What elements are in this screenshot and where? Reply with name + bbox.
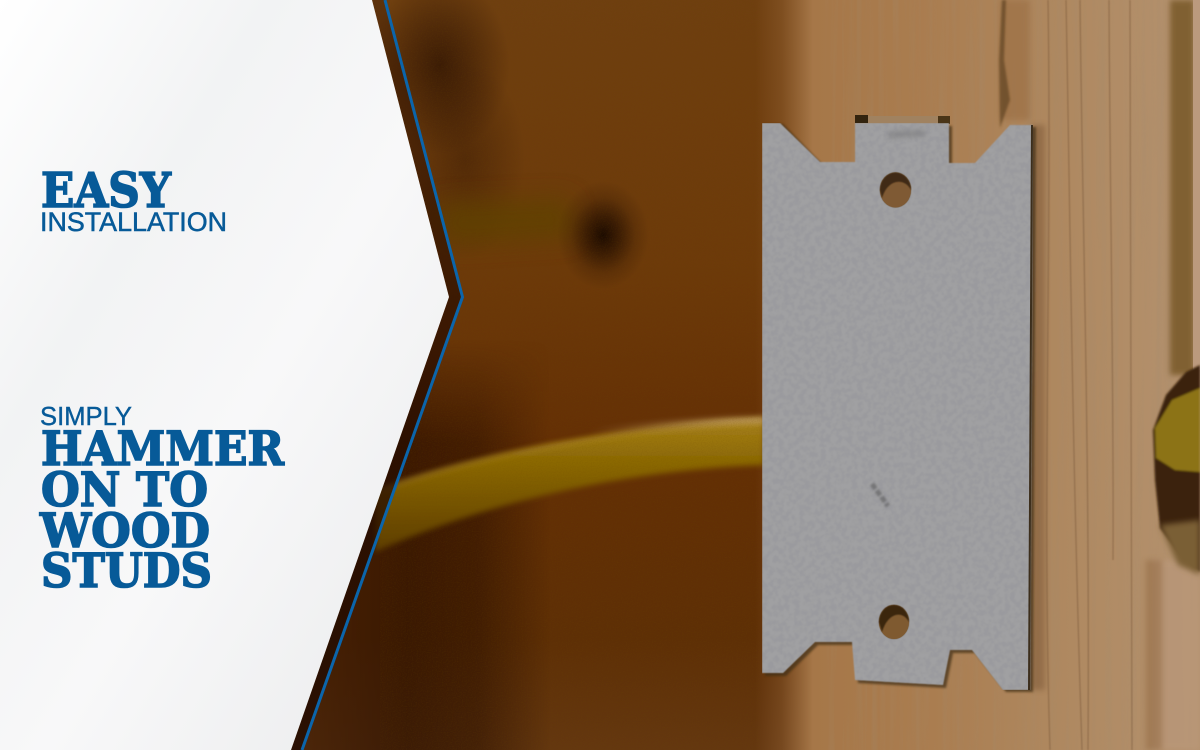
words: on to: ON TO — [41, 463, 208, 518]
plate marks — [872, 484, 888, 506]
heading: easy installation — [40, 163, 227, 237]
blue chevron line — [302, 0, 462, 750]
background photo: blurred brown cavity — [291, 0, 812, 750]
white text panel — [0, 0, 449, 750]
blurred wire in background — [435, 198, 575, 245]
hole: top — [880, 172, 911, 208]
word: studs: STUDS — [41, 544, 212, 599]
word: hammer: HAMMER — [41, 422, 285, 477]
wood stud — [755, 0, 1200, 750]
metal nail plate — [762, 115, 1036, 692]
word: simply: SIMPLY — [40, 401, 132, 431]
heading word: installation: INSTALLATION — [40, 207, 227, 237]
film grain over photo — [380, 0, 760, 750]
heading word: easy: EASY — [41, 163, 172, 219]
dark crack in wood — [999, 0, 1010, 128]
drilled hole with wire — [1153, 365, 1200, 575]
rear stud strip — [1170, 0, 1194, 375]
hole: bottom — [879, 605, 909, 639]
dark band beside white panel — [291, 0, 463, 750]
shadow right of plate — [1031, 125, 1045, 690]
foreground yellow wire — [375, 419, 764, 552]
word: wood: WOOD — [39, 504, 210, 559]
wood grain lines — [1047, 0, 1132, 750]
dark blurred knot — [557, 181, 649, 289]
text block: simply hammer on to wood studs — [39, 401, 285, 599]
